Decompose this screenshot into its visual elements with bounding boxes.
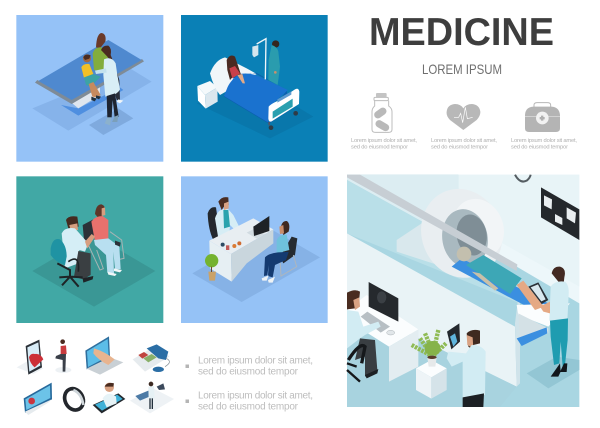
caption: column two: Lorem ipsum dolor sit amet, [431,138,497,144]
figure: woman in chair [83,204,124,276]
bedside cabinet [197,81,218,109]
figure: mother [93,33,123,103]
icon: phone with doctor [93,383,125,413]
panel: desk consultation [181,176,328,323]
panel: patient in bed [181,15,328,162]
figure: nurse with tablet [528,267,569,377]
icon: pill bottle [372,93,392,133]
plant on cabinet [412,330,447,399]
floor mat under nurse [527,357,579,388]
legend item one: Lorem ipsum dolor sit amet, [198,356,313,366]
ceiling hook [515,175,531,182]
caption: column one: sed do eiusmod tempor [351,144,408,150]
panel: MRI room [347,175,579,407]
plant [205,254,218,281]
icon: tablet with heart [24,383,52,415]
legend item two [186,390,313,412]
icon: smartphone with heart [17,340,43,375]
caption: column three: sed do eiusmod tempor [511,144,568,150]
ceiling rail [347,175,517,271]
figure: doctor in office chair [51,216,95,287]
patient on table [457,247,544,310]
figure: nurse [268,40,280,85]
panel: consultation with couple [16,176,163,323]
icon: fitness band [61,386,87,413]
wall board [541,187,579,240]
figure: patient [262,221,297,283]
icon: blood pressure monitor [133,344,169,372]
legend item two: sed do eiusmod tempor [198,402,299,412]
figure: child [81,54,101,101]
desk [209,216,273,282]
figure: doctor [95,46,120,125]
scanner table [452,258,570,346]
caption: column one: Lorem ipsum dolor sit amet, [351,138,417,144]
icon: heart with pulse [447,104,480,130]
caption: column one [351,138,417,150]
operator desk [347,282,418,382]
figure: operator [347,290,381,382]
icon: runner [55,339,71,373]
legend item one: sed do eiusmod tempor [198,366,299,378]
caption: column three: Lorem ipsum dolor sit amet, [511,138,577,144]
figure: seated doctor [208,197,240,240]
caption: column three [511,138,577,150]
caption: column two: sed do eiusmod tempor [431,144,488,150]
figure: doctor with x-ray [447,323,486,407]
legend item one [186,356,313,378]
legend item two: Lorem ipsum dolor sit amet, [198,390,313,402]
icon: first aid kit [525,103,560,132]
subheading: LOREM IPSUM [422,61,502,77]
icon: doctor with patient [130,382,174,413]
IV stand [252,39,266,79]
icon: laptop telemedicine [85,336,123,375]
hospital bed [210,56,299,130]
MRI scanner [397,177,515,289]
caption: column two [431,138,497,150]
panel: family exam [16,15,163,162]
heading: MEDICINE: MEDICINE [369,11,554,54]
